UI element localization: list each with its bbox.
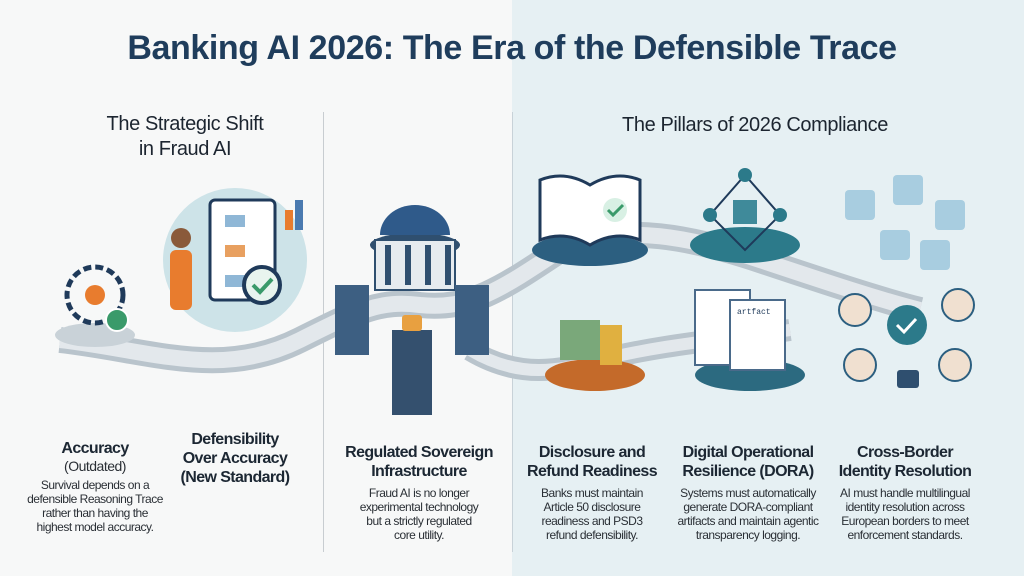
text: DORA: Digital Operational bbox=[683, 444, 813, 461]
icon: DORA document bbox=[695, 290, 805, 391]
text: accuracy: (Outdated) bbox=[64, 458, 126, 474]
text: sovereign infrastructure: but a strictly regulated bbox=[366, 514, 472, 528]
text: cross-border: AI must handle multilingual bbox=[840, 486, 970, 500]
text: accuracy: rather than having the bbox=[42, 506, 148, 520]
text: DORA: Systems must automatically bbox=[680, 486, 816, 500]
text: accuracy: Survival depends on a bbox=[41, 478, 149, 492]
text: defensibility: (New Standard) bbox=[181, 469, 289, 486]
illustration: pipeline and icons bbox=[55, 168, 975, 415]
text: sovereign infrastructure bbox=[345, 444, 493, 542]
text: disclosure: refund defensibility. bbox=[546, 528, 638, 542]
text: disclosure: readiness and PSD3 bbox=[541, 514, 643, 528]
text: DORA: Resilience (DORA) bbox=[682, 463, 814, 480]
text: defensibility bbox=[181, 431, 290, 486]
text: accuracy: highest model accuracy. bbox=[36, 520, 154, 534]
icon: network cube bbox=[690, 168, 800, 263]
heading: strategic shift: The Strategic Shift bbox=[107, 113, 263, 135]
heading: strategic shift bbox=[106, 113, 264, 160]
pipeline path bbox=[60, 235, 920, 370]
text: disclosure: Banks must maintain bbox=[541, 486, 643, 500]
text: defensibility: Defensibility bbox=[191, 431, 279, 448]
text: accuracy: Accuracy bbox=[61, 440, 129, 457]
icon: money and coins bbox=[545, 320, 645, 391]
heading: strategic shift: in Fraud AI bbox=[139, 138, 231, 160]
right background panel bbox=[512, 0, 1024, 576]
icon: analyst with checklist bbox=[163, 188, 307, 332]
text: disclosure: Disclosure and bbox=[539, 444, 645, 461]
text: cross-border: Cross-Border bbox=[857, 444, 953, 461]
text: accuracy: defensible Reasoning Trace bbox=[27, 492, 163, 506]
text: cross-border: enforcement standards. bbox=[847, 528, 963, 542]
icon: open book bbox=[532, 176, 648, 266]
icon: identity network bbox=[839, 175, 974, 388]
title: Banking AI 2026: The Era of the Defensible Trace bbox=[127, 29, 897, 67]
icon: DORA document: artfact bbox=[737, 308, 771, 317]
text: cross-border: identity resolution across bbox=[845, 500, 965, 514]
text: sovereign infrastructure: Regulated Sovereign bbox=[345, 444, 493, 461]
text: cross-border bbox=[839, 444, 971, 542]
text: disclosure: Article 50 disclosure bbox=[544, 500, 640, 514]
text: sovereign infrastructure: Infrastructure bbox=[371, 463, 467, 480]
text: DORA: transparency logging. bbox=[696, 528, 800, 542]
text: cross-border: Identity Resolution bbox=[839, 463, 971, 480]
text: defensibility: Over Accuracy bbox=[183, 450, 287, 467]
icon: sovereign bank and servers bbox=[335, 205, 489, 415]
text: DORA: generate DORA-compliant bbox=[683, 500, 813, 514]
text: DORA bbox=[677, 444, 819, 542]
text: accuracy bbox=[27, 440, 163, 534]
icon: accuracy target bbox=[55, 267, 135, 347]
text: cross-border: European borders to meet bbox=[841, 514, 969, 528]
text: disclosure: Refund Readiness bbox=[527, 463, 657, 480]
text: DORA: artifacts and maintain agentic bbox=[677, 514, 819, 528]
text: sovereign infrastructure: Fraud AI is no longer bbox=[369, 486, 469, 500]
text: sovereign infrastructure: core utility. bbox=[394, 528, 444, 542]
text: disclosure bbox=[527, 444, 657, 542]
text: sovereign infrastructure: experimental technology bbox=[360, 500, 478, 514]
heading: pillars: The Pillars of 2026 Compliance bbox=[622, 114, 888, 136]
